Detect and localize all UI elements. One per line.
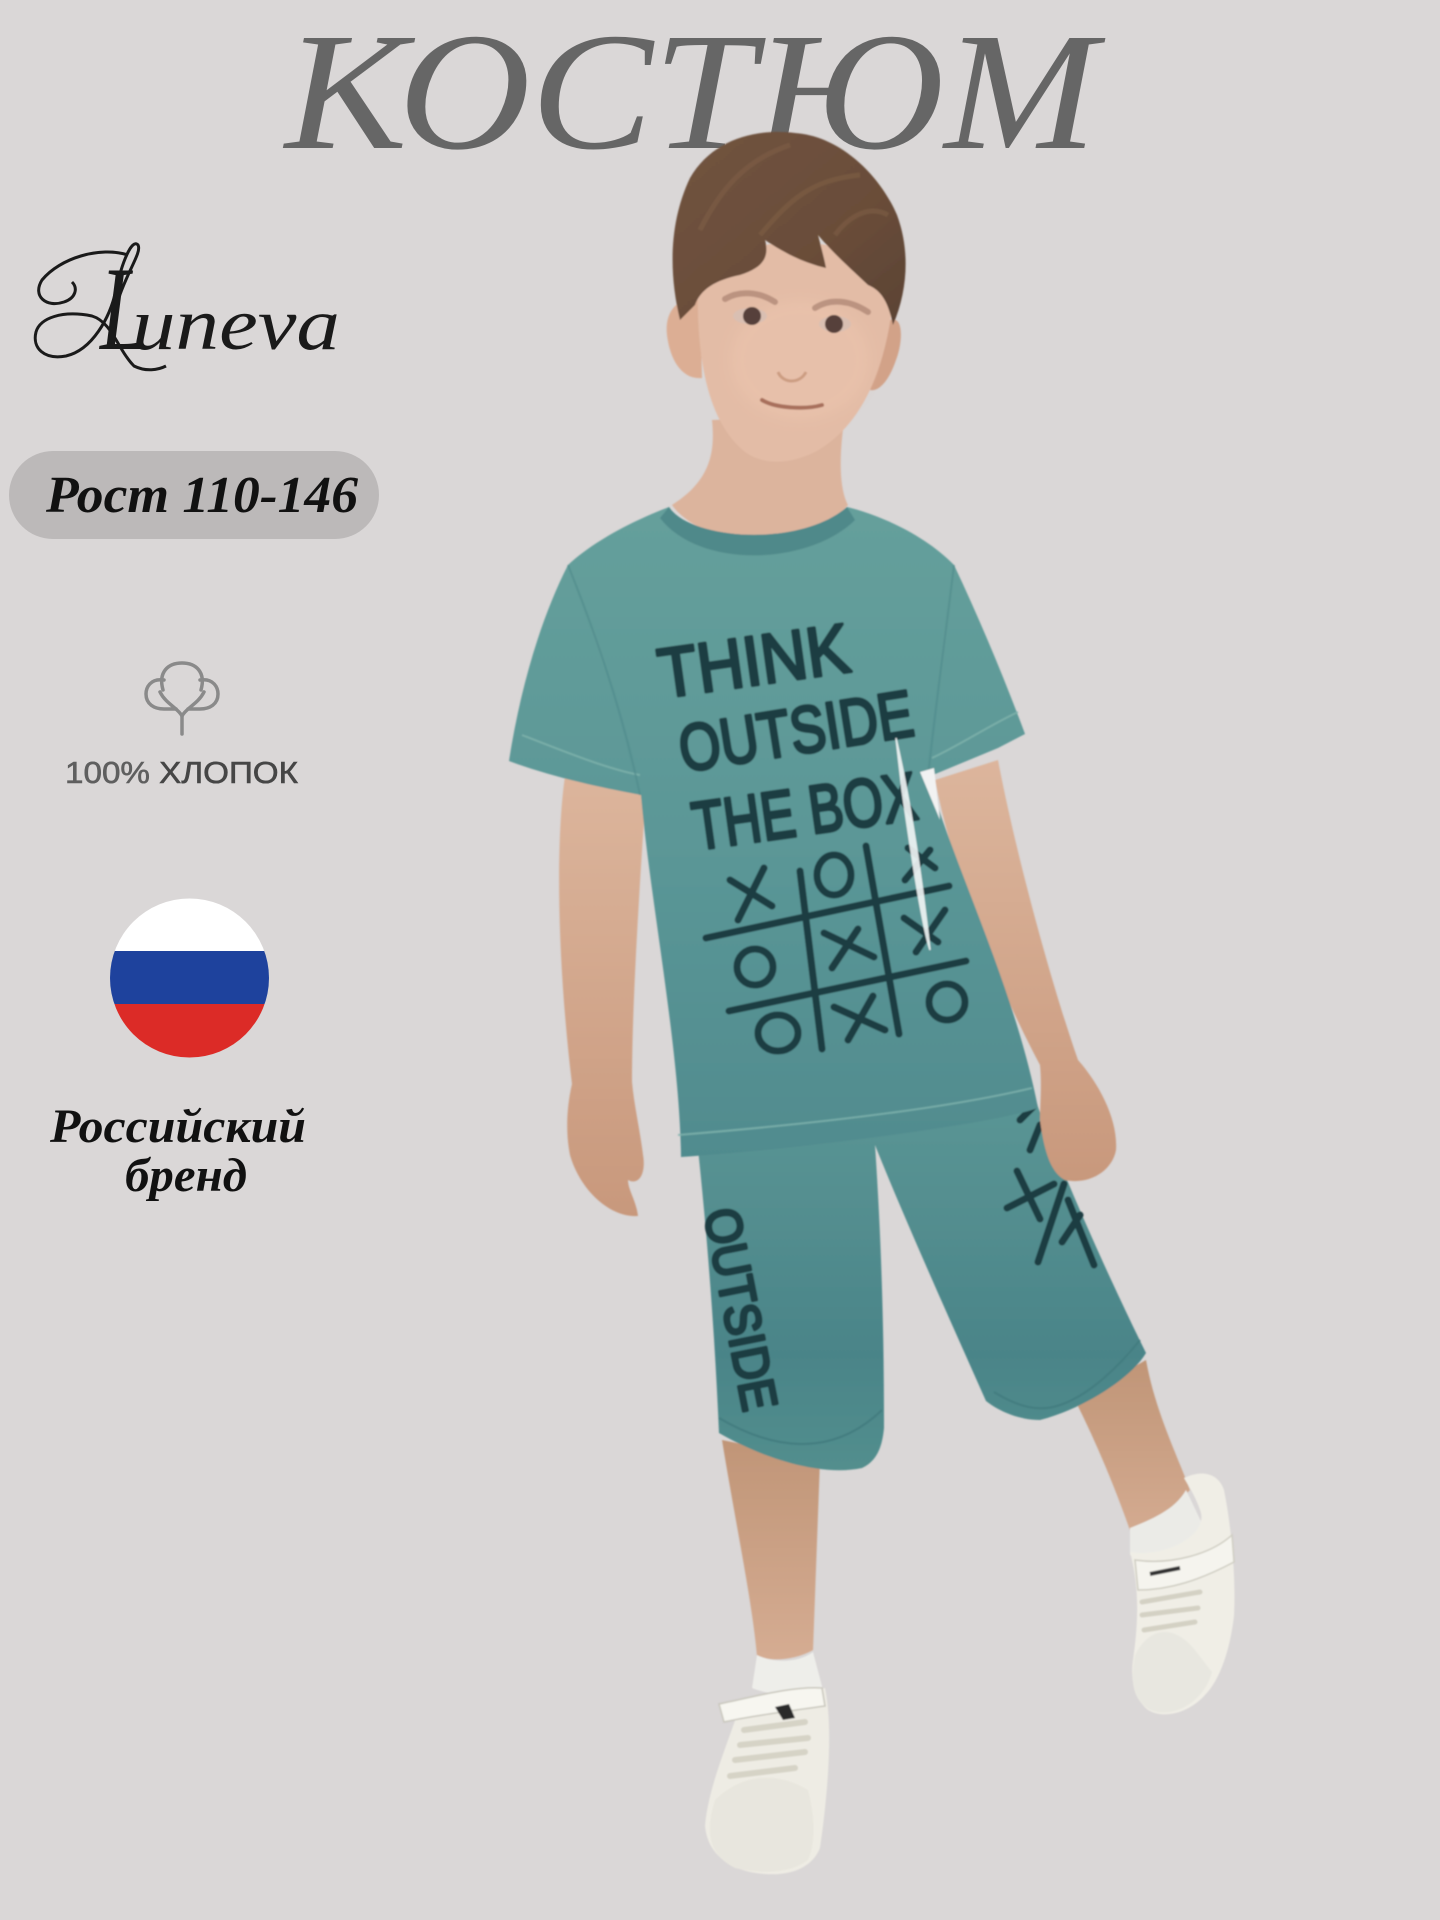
russian brand label: бренд	[125, 1149, 247, 1202]
height badge: Рост 110-146	[45, 467, 358, 524]
right sock	[1130, 1490, 1210, 1557]
russian brand label	[49, 1100, 306, 1202]
shirt glare	[896, 738, 930, 950]
shirt print: THINK: THINK	[653, 609, 854, 713]
mouth	[762, 400, 822, 408]
left shoe	[705, 1688, 829, 1874]
head	[667, 132, 906, 462]
t-shirt	[509, 507, 1038, 1157]
nose	[778, 372, 806, 381]
shirt print: THE BOX: THE BOX	[688, 758, 922, 865]
title: КОСТЮМ	[283, 0, 1106, 185]
neck	[672, 415, 848, 541]
boy photo illustration	[509, 132, 1235, 1874]
shorts print: cross marks	[1007, 1106, 1094, 1265]
right leg	[1075, 1360, 1190, 1545]
shorts	[693, 1085, 1146, 1470]
russian brand label: Российский	[49, 1100, 306, 1153]
cotton label: 100% ХЛОПОК	[65, 755, 298, 790]
brand logo: Luneva: uneva	[132, 284, 340, 366]
shirt print: OUTSIDE: OUTSIDE	[674, 676, 918, 786]
left leg	[722, 1440, 820, 1659]
eyes	[733, 308, 767, 324]
right shoe	[1130, 1474, 1235, 1714]
height badge	[9, 451, 379, 539]
brand logo: Luneva	[35, 242, 340, 375]
shirt print: tic-tac-toe grid	[706, 846, 966, 1051]
ears	[667, 299, 702, 378]
right arm	[935, 760, 1116, 1181]
left sock	[752, 1652, 823, 1694]
left arm	[559, 770, 646, 1216]
hair	[673, 132, 906, 325]
icon: russian flag	[110, 898, 270, 1058]
shorts print: OUTSIDE: OUTSIDE	[693, 1203, 788, 1415]
icon: cotton boll	[146, 663, 218, 734]
brand logo: Luneva: L	[99, 242, 148, 375]
cheek shading	[730, 300, 870, 420]
face	[698, 242, 895, 462]
eyebrows	[725, 293, 868, 312]
